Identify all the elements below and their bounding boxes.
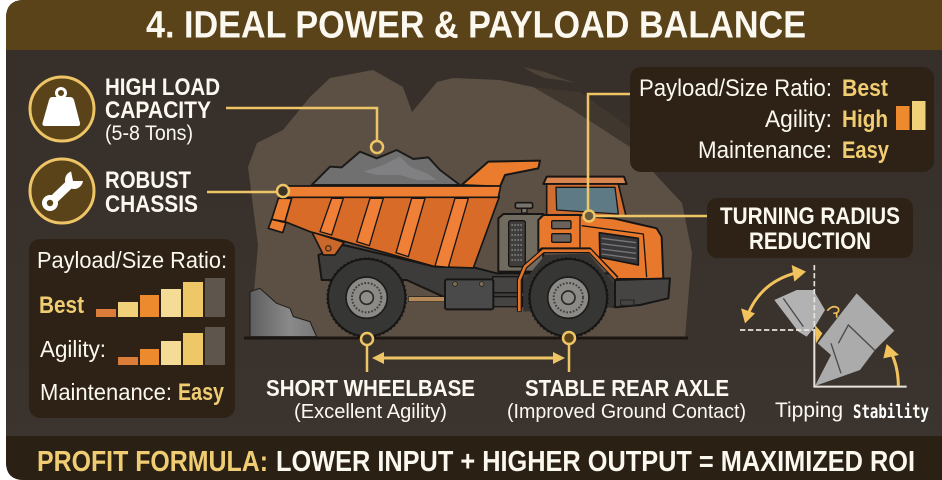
callout: high load capacity: [30, 74, 220, 145]
sublabel: (Improved Ground Contact): [507, 401, 746, 423]
tipping label: Tipping: [775, 399, 843, 422]
profit formula: [37, 446, 915, 478]
large dump block: [815, 293, 894, 386]
cab: [543, 177, 627, 216]
maintenance label: Maintenance:: [698, 137, 832, 164]
agility bars: [118, 327, 225, 365]
agility value: High: [842, 106, 888, 133]
label: short wheelbase: [266, 375, 475, 423]
payload bars: [96, 278, 225, 317]
payload rock heap: [312, 150, 460, 185]
label: stable rear axle: [507, 375, 746, 423]
heading: TURNING RADIUS: [720, 203, 900, 230]
best label: Best: [39, 292, 84, 319]
backdrop shade: [533, 87, 630, 147]
front fender: [519, 251, 617, 312]
engine bay: [498, 203, 543, 272]
maintenance value: Easy: [842, 137, 890, 164]
rear backdrop ridge: [523, 67, 575, 83]
label: stable rear axle: STABLE REAR AXLE: [525, 375, 729, 401]
icon: weight: [30, 77, 94, 141]
small pivot arrow: [815, 325, 822, 343]
upward arc arrow: [883, 344, 899, 386]
dump truck illustration: [250, 150, 670, 337]
icon: wrench: [30, 159, 94, 223]
heading line 2: REDUCTION: [749, 228, 871, 255]
ratio label: Payload/Size Ratio:: [639, 75, 832, 102]
title: 4. IDEAL POWER & PAYLOAD BALANCE: [146, 4, 806, 46]
header band: [0, 0, 942, 50]
hoist bracket: [312, 232, 344, 255]
payload label: Payload/Size Ratio:: [37, 247, 227, 273]
leader line: chassis: [207, 185, 289, 197]
curved double arrow: [741, 265, 806, 323]
footer band: [0, 436, 942, 480]
fuel tank box: [445, 279, 493, 309]
panel: top right ratings: [630, 67, 934, 172]
tipping diagram: [740, 265, 907, 387]
wheelbase dimension arrow: [361, 332, 575, 372]
dashed guides: [740, 265, 814, 330]
maintenance value: Easy: [178, 379, 225, 406]
heading: HIGH LOAD: [105, 74, 220, 101]
callout: turning radius reduction: [707, 198, 913, 258]
small dump block: [774, 290, 825, 337]
ratio value: Best: [842, 75, 888, 102]
drive link: [408, 297, 444, 302]
heading: ROBUST: [105, 167, 191, 194]
small rock pile: [250, 288, 317, 337]
front wheel: [529, 258, 608, 337]
rear wheel: [327, 258, 406, 337]
leader line: ratio panel: [588, 94, 630, 210]
leader line: turning radius: [584, 210, 707, 222]
heading line 2: CHASSIS: [105, 191, 198, 218]
capacity note: (5-8 Tons): [105, 122, 193, 145]
agility label: Agility:: [40, 336, 106, 362]
front bumper: [615, 278, 670, 307]
mini bars: [896, 101, 926, 130]
block creases: [783, 298, 875, 373]
profit formula: PROFIT FORMULA:: [37, 446, 268, 478]
maintenance label: Maintenance:: [40, 379, 172, 405]
sublabel: (Excellent Agility): [294, 401, 447, 423]
axes: [814, 330, 907, 387]
panel: left ratings: [29, 239, 235, 418]
heading line 2: CAPACITY: [105, 97, 211, 124]
ground line: [244, 336, 688, 340]
dump body: [268, 161, 540, 268]
chassis frame: [318, 245, 615, 307]
wheel arch: [523, 253, 615, 312]
agility label: Agility:: [765, 106, 832, 133]
mine backdrop: [248, 70, 692, 338]
callout: robust chassis: [30, 159, 198, 223]
label: short wheelbase: SHORT WHEELBASE: [266, 375, 475, 401]
hood and engine cover: [538, 215, 663, 279]
pivot squiggle: [827, 307, 839, 318]
leader line: load: [226, 108, 383, 153]
